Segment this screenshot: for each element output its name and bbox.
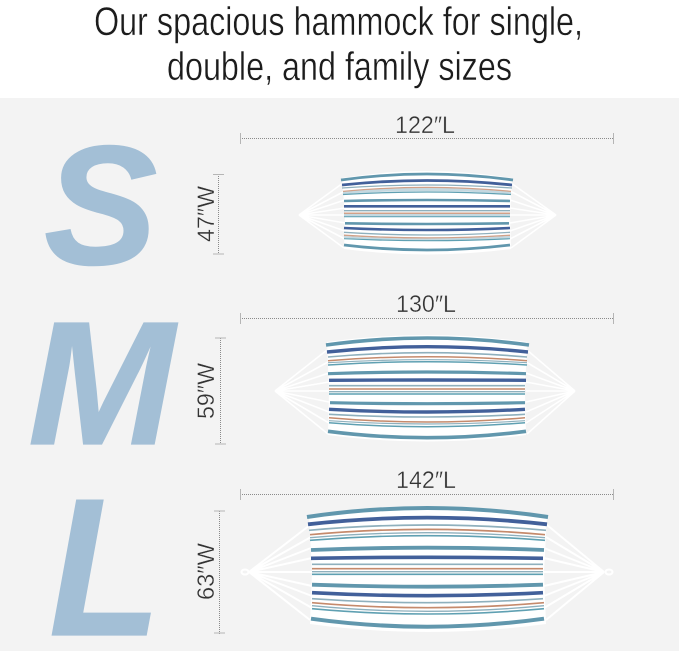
fabric body: medium <box>327 335 527 442</box>
hammock: medium <box>275 335 575 442</box>
fabric body: large <box>309 506 547 632</box>
width dimension: large: 63″W <box>193 543 220 600</box>
title <box>94 0 583 89</box>
length dimension: small <box>240 112 614 144</box>
ropes: medium left and right <box>275 350 575 434</box>
title: double, and family sizes <box>167 45 512 89</box>
stripes: large <box>307 508 548 627</box>
length dimension: large <box>240 467 614 500</box>
width dimension: small: 47″W <box>193 186 220 242</box>
length dimension: large: 142″L <box>396 467 456 494</box>
hammock: small <box>299 171 556 254</box>
length dimension: small: 122″L <box>395 112 455 139</box>
width dimension: small <box>193 174 224 254</box>
stripes: medium <box>326 338 529 438</box>
stripes: small <box>341 174 513 250</box>
hammock: large <box>242 506 612 632</box>
size letter M: M <box>28 286 178 482</box>
ropes: large left and right <box>242 525 612 620</box>
width dimension: medium: 59″W <box>193 363 220 419</box>
size letter S: S <box>44 111 157 301</box>
fabric body: small <box>342 171 512 254</box>
ropes: small left and right <box>299 183 556 248</box>
length dimension: medium: 130″L <box>396 291 456 318</box>
width dimension: medium <box>193 338 226 444</box>
length dimension: medium <box>240 291 614 324</box>
width dimension: large <box>193 511 225 635</box>
